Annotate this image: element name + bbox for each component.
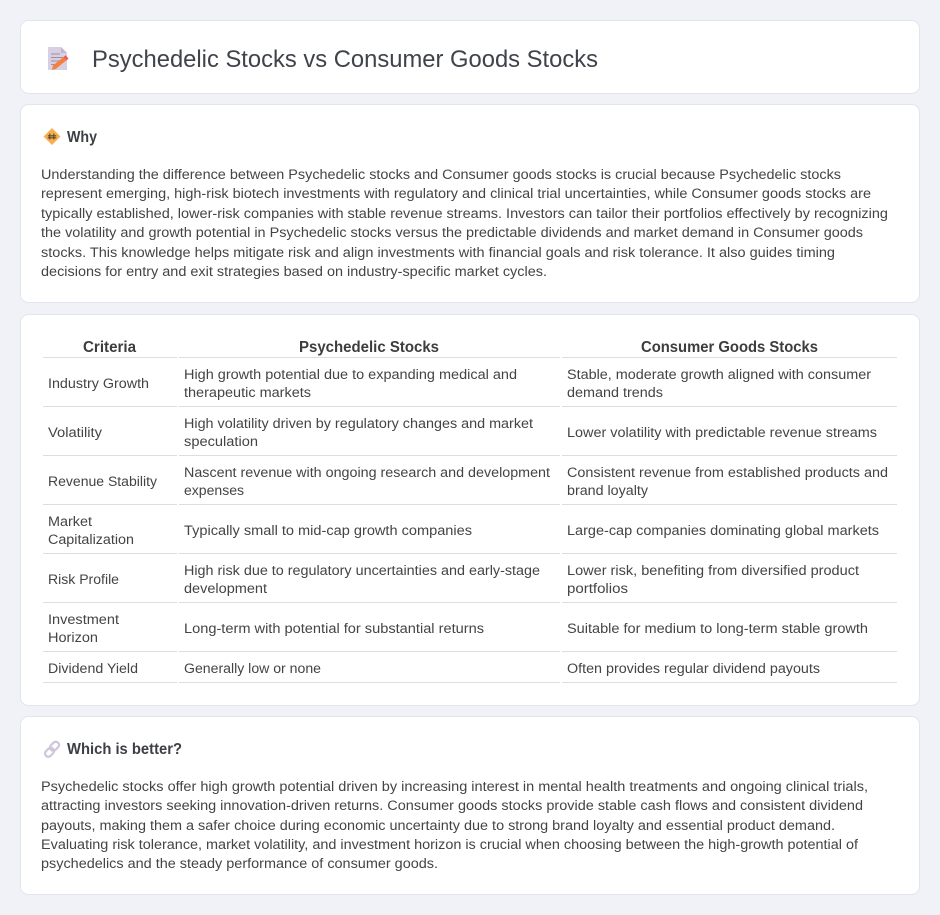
table row: risk profile: portfolios: [567, 581, 628, 597]
table row: revenue stability: Revenue Stability: [48, 474, 158, 490]
table row: dividend yield: [43, 661, 897, 683]
table header row: Psychedelic Stocks: [299, 339, 439, 356]
table row: dividend yield: Often provides regular dividend payouts: [567, 661, 820, 677]
text block: which is better paragraph: [41, 779, 868, 872]
table header row: [43, 339, 897, 358]
table row: volatility: Lower volatility with predictable revenue streams: [567, 425, 877, 441]
text block: which is better paragraph: Psychedelic stocks offer high growth potential driven by increasing interest in mental health treatments and ongoing clinical trials,: [41, 779, 868, 795]
table row: risk profile: [43, 563, 897, 603]
table row: investment horizon: Investment: [48, 612, 119, 628]
table row: revenue stability: expenses: [184, 483, 244, 499]
table row: revenue stability: brand loyalty: [567, 483, 649, 499]
text block: why paragraph: decisions for entry and exit strategies based on industry-specific market cycles.: [41, 264, 547, 280]
text block: why paragraph: stocks. This knowledge helps mitigate risk and align investments with financial goals and risk tolerance. It also guides timing: [41, 245, 835, 261]
text block: which is better paragraph: attracting investors seeking innovation-driven returns. Consumer goods stocks provide stable cash flows and consistent dividend: [41, 798, 863, 814]
text block: why paragraph: Understanding the difference between Psychedelic stocks and Consumer goods stocks is crucial because Psychedelic stocks: [41, 167, 841, 183]
table row: investment horizon: Suitable for medium to long-term stable growth: [567, 621, 868, 637]
text block: why paragraph: the volatility and growth potential in Psychedelic stocks versus the predictable dividends and market demand in Consumer goods: [41, 225, 863, 241]
table row: industry growth: Stable, moderate growth aligned with consumer: [567, 367, 871, 383]
table row: market capitalization: Typically small to mid-cap growth companies: [184, 523, 472, 539]
table row: dividend yield: Generally low or none: [184, 661, 321, 677]
table header row: Consumer Goods Stocks: [641, 339, 818, 356]
table row: risk profile: Risk Profile: [48, 572, 119, 588]
table row: revenue stability: Consistent revenue from established products and: [567, 465, 888, 481]
table row: market capitalization: Market: [48, 514, 92, 530]
table row: industry growth: [43, 367, 897, 407]
table row: market capitalization: Capitalization: [48, 532, 134, 548]
table row: industry growth: High growth potential due to expanding medical and: [184, 367, 517, 383]
heading: why: Why: [67, 129, 97, 146]
table row: risk profile: development: [184, 581, 267, 597]
table row: industry growth: demand trends: [567, 385, 663, 401]
table row: volatility: [43, 416, 897, 456]
table row: risk profile: Lower risk, benefiting from diversified product: [567, 563, 859, 579]
table row: volatility: High volatility driven by regulatory changes and market: [184, 416, 533, 432]
table row: industry growth: Industry Growth: [48, 376, 149, 392]
text block: which is better paragraph: Evaluating risk tolerance, market volatility, and investment horizon is crucial when choosing between the high-growth potential of: [41, 837, 858, 853]
table row: industry growth: therapeutic markets: [184, 385, 311, 401]
table row: revenue stability: Nascent revenue with ongoing research and development: [184, 465, 550, 481]
table row: volatility: speculation: [184, 434, 258, 450]
table row: risk profile: High risk due to regulatory uncertainties and early-stage: [184, 563, 540, 579]
table header row: Criteria: [83, 339, 136, 356]
icon: document with pencil: [48, 47, 68, 70]
text block: why paragraph: [41, 167, 888, 280]
title: Psychedelic Stocks vs Consumer Goods Stocks: [92, 46, 598, 73]
table row: dividend yield: Dividend Yield: [48, 661, 138, 677]
table row: investment horizon: [43, 612, 897, 652]
icon: orange diamond: [44, 128, 60, 145]
icon: chain link: [44, 740, 60, 758]
text block: why paragraph: represent emerging, high-risk biotech investments with regulatory and clinical trial uncertainties, while Consumer goods stocks are: [41, 186, 871, 202]
table row: investment horizon: Horizon: [48, 630, 98, 646]
table row: market capitalization: [43, 514, 897, 554]
table row: investment horizon: Long-term with potential for substantial returns: [184, 621, 484, 637]
text block: why paragraph: typically established, lower-risk companies with stable revenue streams. Investors can tailor their portfolios effectively by recognizing: [41, 206, 888, 222]
panel: which is better: [20, 716, 920, 894]
panel: title card: [20, 20, 920, 94]
table row: market capitalization: Large-cap companies dominating global markets: [567, 523, 879, 539]
table row: revenue stability: [43, 465, 897, 505]
table row: volatility: Volatility: [48, 425, 103, 441]
panel: why: [20, 104, 920, 302]
heading: which is better: Which is better?: [67, 741, 182, 758]
text block: which is better paragraph: payouts, making them a safer choice during economic uncertainty due to strong brand loyalty and essential product demand.: [41, 818, 835, 834]
panel: comparison table: [20, 314, 920, 706]
text block: which is better paragraph: psychedelics and the steady performance of consumer goods.: [41, 856, 438, 872]
